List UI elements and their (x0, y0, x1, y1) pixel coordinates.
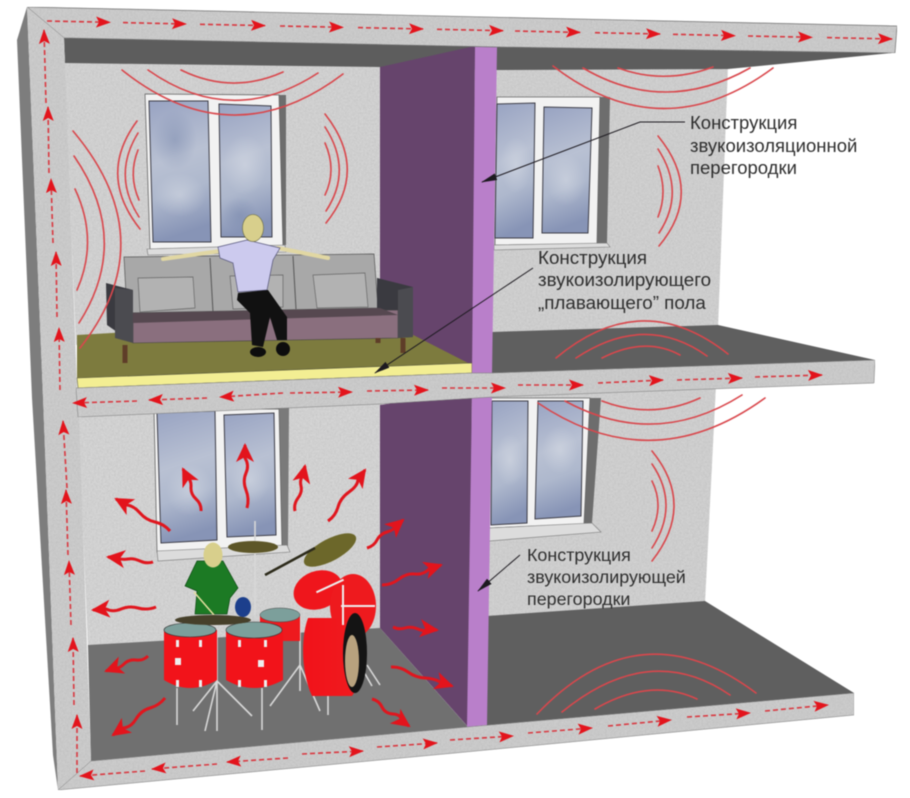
snare drum left (164, 630, 217, 688)
floor: lower right room (487, 601, 854, 727)
rear tom (260, 615, 300, 641)
pointer: floor label (375, 268, 533, 373)
back wall: upper right room (492, 66, 728, 335)
purple partition: lower (380, 391, 472, 728)
sofa arm back right (377, 278, 398, 315)
purple partition end: lower (467, 392, 492, 727)
drum lugs (175, 579, 375, 687)
sound waves: lower right room (537, 395, 765, 714)
dashed arrows: middle slab (73, 375, 822, 403)
window: lower left (154, 408, 290, 561)
window: upper left (145, 94, 286, 255)
concrete column: left (27, 7, 91, 790)
label: lower partition: перегородки (527, 589, 630, 609)
concrete slab: middle (76, 360, 875, 417)
back wall: upper left room (64, 60, 382, 345)
label: lower partition: звукоизолирующей (527, 567, 686, 587)
purple partition end: upper (472, 47, 497, 374)
sofa arm: left (106, 283, 133, 343)
blue knee (235, 597, 251, 617)
label: upper partition: Конструкция (690, 112, 797, 133)
snare drum right (226, 630, 283, 688)
floor: lower left room (88, 628, 468, 762)
drummer (185, 542, 251, 617)
drum kit (164, 521, 380, 731)
concrete slab: top (27, 7, 897, 53)
label: upper partition: звукоизоляционной (690, 135, 857, 156)
floor: upper right room (492, 325, 875, 375)
sofa (106, 254, 413, 363)
arms (163, 248, 328, 259)
stands and legs (177, 521, 380, 731)
dashed arrows: bottom slab (80, 705, 828, 776)
label: floating floor: звукоизолирующего (538, 269, 711, 290)
pointer: partition label (482, 122, 685, 182)
building side face (17, 7, 58, 790)
shoes (250, 347, 266, 357)
label: floating floor: „плавающего” пола (538, 292, 706, 313)
cymbal: over snare (175, 615, 251, 625)
label: floating floor: Конструкция (538, 247, 647, 268)
drum sound arrows (93, 445, 452, 735)
window: upper right (494, 97, 610, 250)
bass drum face (343, 613, 367, 693)
label: lower partition: Конструкция (527, 545, 631, 565)
drumsticks (194, 592, 214, 615)
rear tom head (260, 608, 300, 622)
window: lower right (489, 398, 601, 541)
bass drum (303, 618, 363, 696)
sofa pillows (138, 273, 368, 312)
shirt (218, 240, 280, 292)
sofa legs (125, 338, 403, 363)
upper right tom (330, 574, 376, 638)
floating floor: olive surface (77, 318, 472, 380)
sound waves: upper left room (73, 70, 347, 348)
cymbal: large right (299, 527, 361, 573)
sofa arm: right (377, 278, 413, 338)
dashed arrows: top slab (47, 21, 892, 39)
purple partition: upper (380, 46, 475, 376)
upper left tom (288, 564, 348, 616)
back wall: lower right room (487, 385, 716, 618)
back wall: lower left room (78, 402, 382, 648)
cymbal: hi-hat (228, 541, 278, 553)
dashed arrows: left column (44, 30, 77, 773)
drummer head (204, 542, 222, 568)
ceiling: upper floor (64, 38, 892, 70)
floating floor: yellow layer (77, 363, 472, 388)
sofa backrest (124, 254, 378, 313)
cymbal: thin edge (265, 548, 315, 575)
pointer: lower partition label (478, 555, 520, 591)
green shirt (185, 561, 238, 614)
seated man (163, 214, 328, 357)
head (242, 214, 264, 242)
concrete slab: bottom (58, 693, 854, 790)
trousers (237, 290, 287, 347)
sound waves: upper right room (553, 66, 773, 358)
label: upper partition: перегородки (690, 157, 797, 178)
sofa seat (133, 310, 398, 343)
